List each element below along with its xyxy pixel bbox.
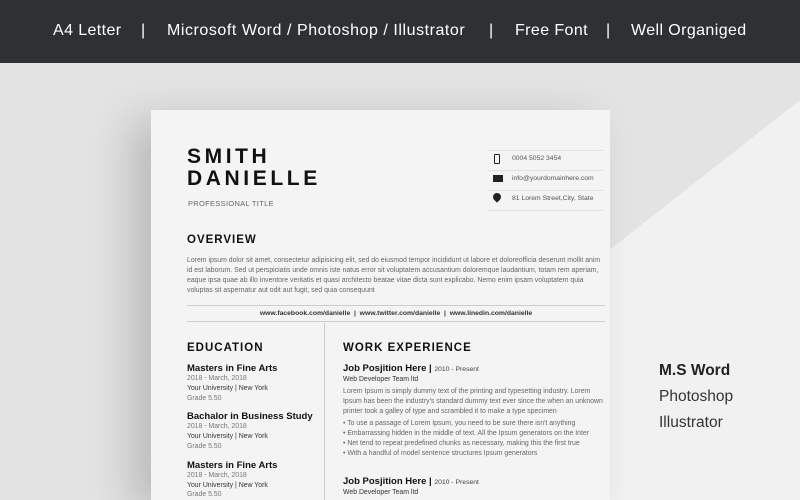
- contact block: 81 Lorem Street,City, State: [512, 195, 593, 202]
- work experience section: Web Developer Team ltd: [343, 376, 418, 383]
- top bar: Well Organiged: [631, 22, 747, 39]
- work experience section: Lorem Ipsum is simply dummy text of the printing and typesetting industry. Lorem Ipsum has been the industry's standard dummy text ever since the when an unknown printer took a galley of type and scrambled it to make a type specimen: [343, 388, 603, 415]
- work experience section: [343, 342, 603, 496]
- work experience section: Job Posjition Here | 2010 - Present: [343, 363, 479, 374]
- education section: Your University | New York: [187, 433, 268, 440]
- education section: Masters in Fine Arts: [187, 460, 277, 471]
- name: DANIELLE: [187, 167, 321, 190]
- contact block: info@yourdomainhere.com: [512, 175, 594, 182]
- education section: EDUCATION: [187, 342, 264, 354]
- work experience section: Job Posjition Here | 2010 - Present: [343, 476, 479, 487]
- education section: Grade 5.50: [187, 443, 221, 450]
- name: SMITH: [187, 145, 270, 168]
- education section: Masters in Fine Arts: [187, 363, 277, 374]
- software list: Photoshop: [659, 388, 733, 405]
- professional title: PROFESSIONAL TITLE: [188, 199, 274, 208]
- contact block: 0004 5052 3454: [512, 155, 561, 162]
- work experience section: • Embarrassing hidden in the middle of text. All the Ipsum generators on the Inter: [343, 430, 589, 437]
- social links: www.facebook.com/danielle | www.twitter.com/danielle | www.linedin.com/danielle: [260, 310, 532, 317]
- icon: phone: [494, 154, 500, 164]
- contact block: [488, 150, 604, 211]
- work experience section: • To use a passage of Lorem Ipsum, you need to be sure there isn't anything: [343, 420, 575, 427]
- education section: 2018 - March, 2018: [187, 375, 247, 382]
- social links: [187, 305, 605, 322]
- top bar: |: [606, 22, 611, 39]
- overview text: Lorem ipsum dolor sit amet, consectetur adipisicing elit, sed do eiusmod tempor incididunt ut labore et doloreofficia deserunt mollit anim id est laborum. Sed ut perspiciatis unde omnis iste natus error sit voluptatem accusantium doloremque laudantium, totam rem aperiam, eaque ipsa quae ab illo inventore veritatis et quasi architecto beatae vitae dicta sunt explicabo. Nemo enim ipsam voluptatem quia voluptas sit aspernatur aut odit aut fugit, sed quia consequunt: [187, 257, 600, 294]
- top bar: Free Font: [515, 22, 588, 39]
- work experience section: WORK EXPERIENCE: [343, 342, 472, 354]
- icon: mail: [493, 175, 503, 182]
- name: [187, 145, 321, 190]
- top bar: |: [489, 22, 494, 39]
- icon: location: [491, 191, 503, 203]
- top bar: A4 Letter: [53, 22, 122, 39]
- work experience section: • With a handful of model sentence structures Ipsum generators: [343, 450, 537, 457]
- education section: Grade 5.50: [187, 395, 221, 402]
- resume paper: [151, 110, 610, 500]
- education section: 2018 - March, 2018: [187, 423, 247, 430]
- education section: Your University | New York: [187, 482, 268, 489]
- top bar: Microsoft Word / Photoshop / Illustrator: [167, 22, 465, 39]
- education section: Grade 5.50: [187, 491, 221, 498]
- education section: Your University | New York: [187, 385, 268, 392]
- education section: [187, 342, 313, 498]
- top bar: |: [141, 22, 146, 39]
- software list: Illustrator: [659, 414, 723, 431]
- software list: M.S Word: [659, 362, 730, 379]
- work experience section: • Net tend to repeat predefined chunks as necessary, making this the first true: [343, 440, 580, 447]
- overview heading: OVERVIEW: [187, 234, 257, 246]
- software list: [659, 362, 733, 431]
- education section: Bachalor in Business Study: [187, 411, 313, 422]
- top bar: [0, 0, 800, 63]
- work experience section: Web Developer Team ltd: [343, 489, 418, 496]
- education section: 2018 - March, 2018: [187, 472, 247, 479]
